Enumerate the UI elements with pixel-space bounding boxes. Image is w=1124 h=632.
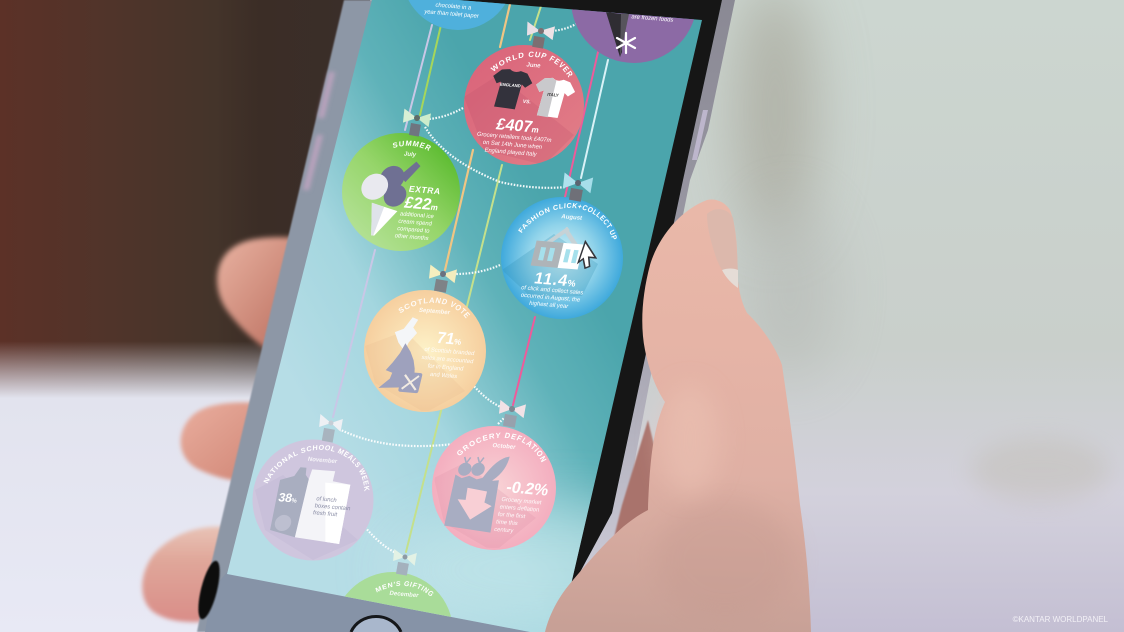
bauble: Scotland Vote: September xyxy=(418,307,451,316)
description: Grocery retailers took £407m xyxy=(476,132,552,144)
hanging strings xyxy=(333,0,608,552)
bow: school xyxy=(319,414,343,442)
bauble: Grocery Deflation: Grocery market xyxy=(501,497,542,506)
bauble: World Cup Fever: VS. xyxy=(522,99,532,106)
bauble: Summer: compared to xyxy=(396,226,431,235)
bauble: Scotland Vote: 71% xyxy=(435,329,464,349)
bauble: Summer xyxy=(342,133,460,251)
bauble: World Cup Fever: June xyxy=(526,61,542,70)
icon: lunchbox right: fresh fruit xyxy=(312,510,338,518)
bauble: Scotland Vote: of Scottish branded xyxy=(424,347,475,357)
bauble: Grocery Deflation: time this xyxy=(495,519,518,527)
bauble: Summer: EXTRA xyxy=(408,184,442,196)
left metal edge xyxy=(197,0,375,632)
bauble: Grocery Deflation: century xyxy=(493,527,514,534)
bauble: Fashion click and collect xyxy=(501,197,623,319)
bauble: top blue: chocolate in a xyxy=(435,3,473,12)
bauble: Summer: additional ice xyxy=(399,211,434,220)
ribbon bows and caps xyxy=(316,22,593,577)
bow: grocery xyxy=(499,400,526,428)
description: England played Italy xyxy=(484,148,537,158)
bauble: Scotland Vote: and Wales xyxy=(429,372,458,380)
bauble: Grocery Deflation: October xyxy=(492,442,517,451)
bow: summer xyxy=(403,108,431,137)
home button xyxy=(351,616,401,632)
bauble: Fashion click and collect: 11.4% xyxy=(532,269,579,291)
bauble: Fashion click and collect: of click and collect sales xyxy=(520,285,584,296)
black bezel xyxy=(450,0,722,600)
copyright: ©KANTAR WORLDPANEL xyxy=(1013,615,1109,624)
icon: Italy shirt: ITALY xyxy=(547,92,559,98)
bauble: National School Meals Week xyxy=(252,440,374,560)
bauble: Summer: SUMMER xyxy=(392,140,431,151)
bow: scotland xyxy=(429,264,457,293)
bauble: Grocery Deflation: GROCERY DEFLATION xyxy=(457,432,546,462)
phone body xyxy=(194,0,735,632)
bauble: frozen foods purple: are frozen foods xyxy=(631,14,674,24)
bauble: top blue xyxy=(408,0,506,30)
icon: lunchbox right xyxy=(295,470,350,544)
icon: cursor xyxy=(577,241,599,269)
bauble: frozen foods purple xyxy=(572,9,694,63)
lower bezel xyxy=(205,572,535,632)
middle finger xyxy=(181,402,275,481)
icon: snowflake xyxy=(617,33,635,53)
bauble: Grocery Deflation: -0.2% xyxy=(504,478,551,500)
bauble: Men's Gifting xyxy=(344,572,451,617)
bauble: Summer: cream spend xyxy=(398,219,432,227)
bauble: World Cup Fever xyxy=(464,45,584,165)
description: on Sat 14th June when xyxy=(482,140,543,151)
title: WORLD CUP FEVER xyxy=(490,52,572,78)
phone screen xyxy=(227,0,702,632)
bow: world cup xyxy=(527,22,555,49)
bauble: Summer: £22m xyxy=(403,194,441,214)
icon: lunchbox right: of lunch xyxy=(316,496,337,504)
bauble: Fashion click and collect: August xyxy=(561,213,583,222)
right metal edge xyxy=(585,0,735,570)
icon: ice cream xyxy=(361,162,420,236)
bow: mens xyxy=(393,549,417,576)
icon: basket xyxy=(530,227,584,270)
bauble: Scotland Vote: for in England xyxy=(427,364,464,373)
bauble: National School Meals Week: November xyxy=(307,456,339,465)
bauble: Fashion click and collect: occurred in August, the xyxy=(520,293,581,304)
bauble: Summer: other months xyxy=(394,233,429,242)
bauble: Scotland Vote: sales are accounted xyxy=(421,355,474,365)
icon: lunchbox right: boxes contain xyxy=(314,503,351,512)
bauble: Men's Gifting: MEN'S GIFTING xyxy=(375,581,434,596)
ring finger xyxy=(142,527,228,622)
icon: luggage tag xyxy=(398,372,423,393)
black phone corner xyxy=(194,559,224,621)
index finger xyxy=(217,237,305,350)
bauble: Fashion click and collect: highest all year xyxy=(528,301,569,310)
bow: fashion xyxy=(560,173,593,203)
bauble: top blue: year than toilet paper xyxy=(424,9,479,20)
fingers behind the phone xyxy=(142,237,305,622)
bauble: Summer: July xyxy=(403,151,417,159)
bauble: National School Meals Week: NATIONAL SCHOOL MEALS WEEK xyxy=(264,444,370,492)
bauble: Scotland Vote: SCOTLAND VOTE xyxy=(398,298,470,318)
icon: England shirt: ENGLAND xyxy=(500,82,521,88)
icon: map of Britain xyxy=(378,317,422,394)
bauble: Fashion click and collect: FASHION CLICK+COLLECT UP xyxy=(518,203,617,240)
pearl garlands xyxy=(339,24,576,553)
thumbnail xyxy=(707,209,738,288)
hand: thumb xyxy=(545,199,811,632)
bauble: Grocery Deflation: enters deflation xyxy=(499,504,540,514)
bauble: Grocery Deflation xyxy=(432,426,556,550)
bauble: Men's Gifting: December xyxy=(389,590,420,599)
bauble: Scotland Vote xyxy=(364,290,486,412)
icon: grocery bag xyxy=(442,453,510,533)
figure: £407m xyxy=(494,115,541,137)
hand: palm shadow behind thumb xyxy=(612,420,660,545)
right side button xyxy=(692,110,708,160)
icon: lunchbox left: 38% xyxy=(277,490,300,506)
bauble: Grocery Deflation: for the first xyxy=(497,512,526,520)
left side buttons xyxy=(303,72,335,190)
